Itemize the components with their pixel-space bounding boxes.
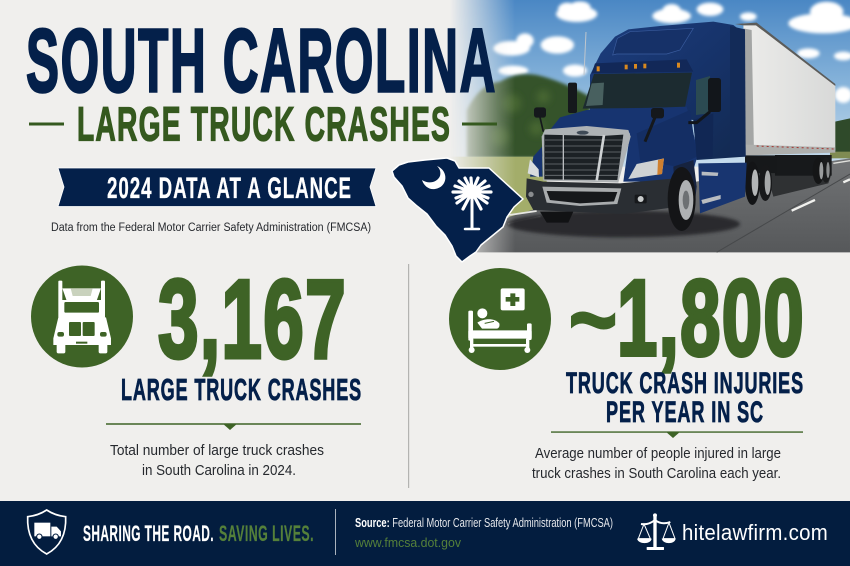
description: in South Carolina in 2024. — [142, 463, 296, 479]
source credit: Source: Federal Motor Carrier Safety Administration (FMCSA) — [355, 516, 613, 530]
center divider line — [408, 264, 409, 488]
panel: truck crashes statistic — [31, 258, 362, 479]
icon: scales of justice — [637, 513, 676, 550]
banner: 2024 data at a glance: 2024 DATA AT A GLANCE — [107, 172, 352, 205]
banner: 2024 data at a glance — [58, 168, 376, 206]
label: truck crash injuries per year — [566, 367, 804, 429]
pointer rule — [106, 423, 361, 430]
big number about 1,800 — [568, 257, 805, 379]
footer bar — [0, 501, 850, 566]
panel: truck crash injuries statistic — [449, 257, 805, 482]
data source note: Data from the Federal Motor Carrier Safety Administration (FMCSA) — [51, 222, 371, 234]
photo: blue semi truck on highway — [440, 0, 850, 252]
pointer rule — [551, 431, 803, 438]
description: truck crashes in South Carolina each year. — [532, 466, 781, 482]
subtitle: Large Truck Crashes with side rules: LARGE TRUCK CRASHES — [77, 98, 451, 152]
description: Total number of large truck crashes — [110, 443, 324, 459]
tree line shape — [467, 74, 590, 158]
icon: shield with delivery truck — [28, 510, 66, 554]
icon: South Carolina state map with crescent and palmetto — [392, 158, 523, 262]
label: large truck crashes: LARGE TRUCK CRASHES — [121, 372, 362, 407]
subtitle: Large Truck Crashes with side rules — [29, 98, 497, 152]
big number 3,167: 3,167 — [158, 258, 347, 382]
icon: patient in hospital bed in green circle — [449, 268, 551, 370]
big number about 1,800: ~ — [568, 258, 618, 379]
tagline: SAVING LIVES. — [219, 521, 314, 546]
icon: truck front in green circle — [31, 266, 133, 368]
website: hitelawfirm.com — [682, 520, 828, 545]
tagline: SHARING THE ROAD. — [83, 521, 214, 546]
source url: www.fmcsa.dot.gov — [354, 535, 461, 550]
description: Average number of people injured in large — [535, 446, 781, 462]
